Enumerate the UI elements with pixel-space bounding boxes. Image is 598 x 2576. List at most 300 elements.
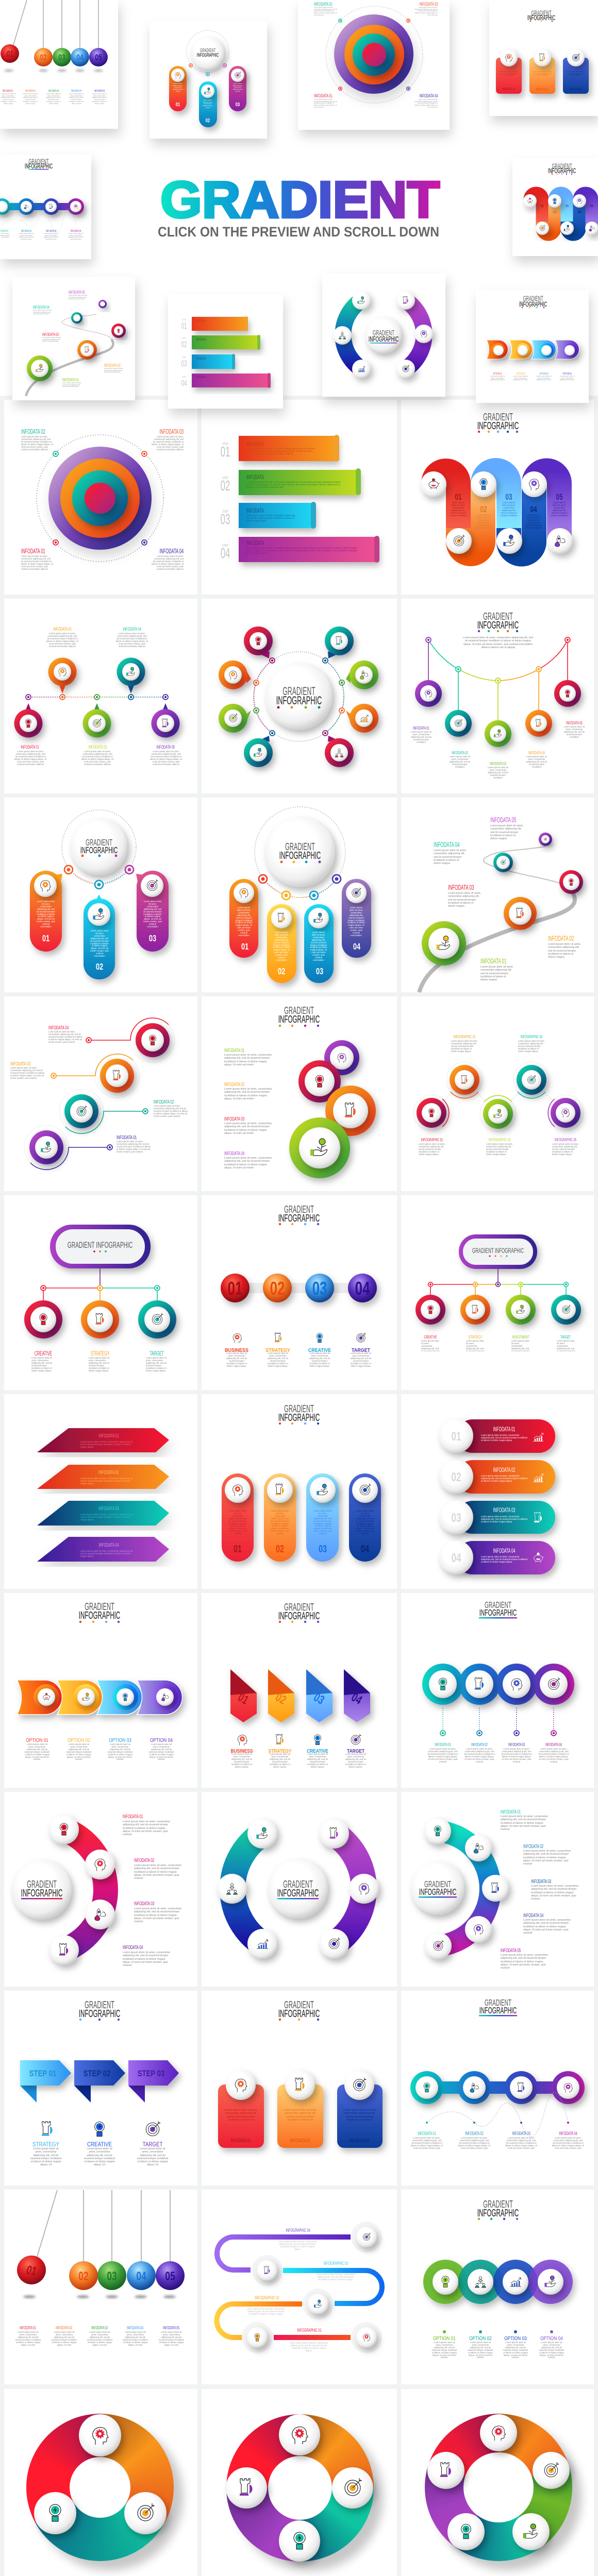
center sphere: [268, 1859, 328, 1919]
text: infodata 01: INFODATA 01: [435, 1743, 451, 1747]
hero card: s-curve right: INFOGRAPHIC: [548, 167, 576, 175]
band labels: 05: [556, 493, 563, 502]
hero card: s-curve right: 02: [553, 210, 556, 214]
column 04: Lorem ipsum dolor sit amet, consectetur adipiscing elit, sed do eiusmod tempor incididunt ut labore et dolore magna aliqua. Ut enim ad minim veniam, quis nostrud: [356, 1510, 374, 1535]
hero card: chain left: [0, 155, 91, 259]
text: infodata 05: INFODATA 05: [501, 1947, 521, 1953]
text: infographic 04: [518, 1035, 545, 1058]
panel: beaded chain: [401, 1991, 594, 2185]
panel: four rounded columns: [202, 1394, 397, 1589]
center sphere title: [265, 817, 335, 887]
nodes: [427, 2414, 570, 2550]
panel: newton cradle: [4, 2190, 197, 2384]
arc: [438, 1831, 490, 1946]
hero card: s-curve right: GRADIENT: [552, 163, 572, 171]
dotted drops: [443, 1708, 554, 1730]
text: infodata 01: [15, 2326, 41, 2351]
text: infodata 04: INFODATA 04: [523, 1912, 543, 1918]
strings: [37, 2190, 170, 2262]
ribbon 04: INFODATA 04: [98, 1541, 119, 1548]
text: infodata 02: INFODATA 02: [465, 2131, 484, 2136]
hero card: ribbons: INFODATA: [196, 357, 206, 361]
hero card: ribbons: 03: [181, 359, 187, 368]
column 02: 02: [276, 1543, 284, 1555]
hero card: chain left: INFOGRAPHIC: [25, 163, 53, 171]
panel: concentric circles infographic: [4, 400, 197, 595]
nodes: [34, 1684, 178, 1710]
text: infodata 01: INFODATA 01: [224, 1047, 244, 1053]
balls: 01: [25, 2263, 37, 2278]
hero card: ribbons: [168, 294, 283, 409]
hero card: road: INFODATA 03: [42, 333, 59, 337]
text: strategy: STRATEGY: [32, 2141, 59, 2148]
center sphere title: GRADIENT: [285, 841, 315, 853]
nodes: [49, 1815, 115, 1965]
ring: [226, 2414, 374, 2562]
icon nodes: [421, 471, 573, 554]
text: option 02: OPTION 02: [469, 2335, 492, 2342]
panel: zigzag five nodes: [401, 996, 594, 1191]
markers: [64, 866, 134, 889]
center sphere title: [265, 663, 333, 730]
text: infodata 02: INFODATA 02: [56, 2326, 72, 2330]
nodes: [217, 1819, 379, 1959]
row 03: INFODATA 03: [493, 1507, 516, 1514]
text: infodata 02: Lorem ipsum dolor sit amet, consectetur adipiscing elit, sed do eiusmod tempor incididunt ut labore et dolore magna aliqua. Ut enim ad minim veniam, quis nostrud: [134, 1864, 181, 1880]
hero card: concentric circles: INFODATA 02: [314, 2, 333, 7]
step 04: 04: [221, 545, 230, 561]
text: infographic 01: INFOGRAPHIC 01: [421, 1138, 443, 1142]
pill 03: [304, 904, 334, 983]
text: infodata 02: [224, 1081, 274, 1104]
ribbon 02: INFODATA 02: [98, 1469, 119, 1475]
text: infodata 05: Lorem ipsum dolor sit amet, consectetur adipiscing elit, sed do eiusmod tempor incididunt ut labore et dolore magna aliqua. Ut enim ad minim veniam, quis nostrud: [501, 1954, 548, 1970]
text: option 03: OPTION 03: [109, 1737, 131, 1743]
text: infodata 02: INFODATA 02: [53, 626, 72, 632]
hero card: three pills: GRADIENT: [200, 47, 215, 53]
hero card: chevrons: OPTION 04: [563, 372, 572, 375]
text: infodata 04: INFODATA 04: [123, 626, 141, 632]
hero card: three boxes: INFODATA 01: [503, 88, 515, 91]
dotted timeline: [28, 697, 165, 698]
overlapping circles: [423, 2260, 573, 2304]
hero card: pendulum: 05: [95, 53, 102, 63]
text: infodata 04: Lorem ipsum dolor sit amet, consectetur adipiscing elit, sed do eiusmod tempor incididunt ut labore et dolore magna aliqua. Ut enim ad minim veniam, quis nostrud: [523, 1919, 571, 1935]
node: target: [138, 1300, 176, 1372]
markers: [259, 875, 341, 900]
column 03: 03: [319, 1543, 327, 1555]
panel: central sphere with eight pins: [202, 599, 397, 793]
text: infodata 03: [87, 2326, 112, 2351]
text: infodata 01: [21, 548, 53, 571]
text: infographic 04: [277, 2228, 318, 2251]
title: GRADIENT: [284, 1999, 314, 2011]
text: infographic 01: INFOGRAPHIC 01: [297, 2328, 322, 2333]
hero card: chain left: INFODATA 03: [46, 229, 57, 232]
hero card: three boxes: [489, 0, 598, 116]
text: option 02: OPTION 02: [68, 1737, 90, 1743]
text: infodata 03: [152, 429, 184, 451]
text: option 01: OPTION 01: [26, 1737, 48, 1743]
hero card: three boxes: GRADIENT: [531, 10, 552, 18]
step 04: [221, 536, 379, 563]
pill 02: 02: [96, 962, 103, 972]
nodes: [226, 2414, 373, 2562]
band labels: 01: [455, 493, 462, 502]
text: infodata 03: INFODATA 03: [512, 2131, 530, 2136]
node 03: [95, 1054, 139, 1098]
text: infodata 04: INFODATA 04: [48, 1024, 69, 1030]
title: INFOGRAPHIC: [79, 2008, 120, 2020]
text: infodata 02: Lorem ipsum dolor sit amet, consectetur adipiscing elit, sed do eiusmod tempor incididunt ut labore et dolore magna aliqua. Ut enim ad minim veniam, quis nostrud: [523, 1850, 571, 1866]
text: infographic 03: INFOGRAPHIC 03: [489, 1138, 510, 1142]
row 02: [439, 1460, 555, 1494]
ribbon 01: INFODATA 01: [98, 1432, 119, 1438]
icons: [429, 1670, 568, 1698]
text: infodata 03: [531, 1878, 579, 1902]
text: infodata 04: INFODATA 04: [224, 1150, 244, 1156]
chart: nested gradient discs: [48, 447, 152, 550]
pill 01: 01: [42, 934, 49, 944]
text: infodata 03: [224, 1115, 274, 1139]
pins: [14, 657, 179, 738]
text: creative: CREATIVE: [87, 2141, 112, 2148]
text: infodata 02: [134, 1857, 182, 1881]
hero card: s-curve right: [512, 158, 598, 256]
center sphere: GRADIENT: [424, 1879, 451, 1890]
ball purple: [324, 1040, 359, 1075]
text: infodata 03: INFODATA 03: [134, 1900, 154, 1906]
text: infodata 04: Lorem ipsum dolor sit amet, consectetur adipiscing elit, sed do eiusmod tempor incididunt ut labore et dolore magna: [434, 849, 467, 865]
hero card: pendulum: 02: [40, 53, 47, 63]
title: INFOGRAPHIC: [479, 1608, 517, 1618]
title: [477, 2199, 519, 2220]
panel: horizontal capsules with spheres: [401, 1394, 594, 1589]
text: infodata 01: INFODATA 01: [117, 1134, 137, 1140]
text: infodata 02: Lorem ipsum dolor sit amet, consectetur adipiscing elit, sed do eiusmod tempor incididunt ut labore et dolore magna aliqua. Ut enim ad minim: [224, 1088, 272, 1100]
text: option 03: Lorem ipsum dolor sit amet, consectetur adipiscing elit, sed do eiusmod tempor incididunt ut labore et dolore magna aliqua. Ut enim ad minim veniam,: [503, 2342, 528, 2359]
tag 03: 03: [311, 1690, 327, 1707]
text: infodata 04: [116, 626, 148, 648]
stops: [422, 833, 583, 965]
title capsule: [50, 1225, 151, 1268]
panel: ring five segments: [401, 2389, 594, 2576]
balls: 02: [270, 1278, 285, 1299]
balls: 03: [107, 2269, 117, 2283]
text: strategy: STRATEGY: [265, 1347, 290, 1353]
node: strategy: STRATEGY: [469, 1335, 483, 1340]
pill 03: Lorem ipsum dolor sit amet, consectetur adipiscing elit, sed do eiusmod tempor incididunt ut labore et dolore magna aliqua. Ut enim ad minim veniam, quis nostrud exercitation: [310, 931, 327, 961]
step 03: 03: [221, 511, 230, 527]
text: infographic 03: INFOGRAPHIC 03: [323, 2261, 348, 2266]
node: strategy: [460, 1295, 490, 1351]
flag 01: STEP 01: [29, 2069, 56, 2078]
tag 01: [230, 1669, 257, 1722]
text: infodata 01: INFODATA 01: [413, 726, 429, 731]
text: infodata 02: INFODATA 02: [21, 429, 45, 436]
text: target: TARGET: [352, 1347, 370, 1353]
text: infodata 02: [52, 2326, 77, 2351]
ring: [26, 2414, 174, 2561]
text: option 02: [66, 1737, 92, 1762]
hero card: chevrons: OPTION 02: [517, 372, 525, 375]
text: infodata 01: [480, 958, 513, 982]
row 04: 04: [451, 1551, 461, 1565]
panel: step flags: [4, 1991, 197, 2185]
hero card: concentric circles: [298, 0, 450, 130]
text: infodata 04: INFODATA 04: [559, 2131, 577, 2136]
text: creative: CREATIVE: [307, 1748, 328, 1754]
text: strategy: [269, 1734, 292, 1768]
text: infodata 02: [458, 2131, 490, 2155]
text: creative: [306, 1735, 329, 1768]
tag 02: 02: [273, 1690, 289, 1707]
tag 03: [306, 1669, 333, 1722]
text: infodata 01: Lorem ipsum dolor sit amet, consectetur adipiscing elit, sed do eiusmod tempor incididunt ut labore et dolore magna aliqua. Ut enim ad minim veniam, quis nostrud: [123, 1820, 170, 1836]
text: infodata 01: [224, 1047, 274, 1070]
step 03: [221, 502, 316, 529]
title: [278, 1204, 320, 1225]
connectors: [41, 1268, 160, 1301]
title: [479, 1998, 517, 2016]
card 03: Lorem ipsum dolor sit amet, consectetur adipiscing elit, sed do eiusmod tempor incididunt ut labore et: [343, 2109, 376, 2122]
column 02: Lorem ipsum dolor sit amet, consectetur adipiscing elit, sed do eiusmod tempor incididunt ut labore et dolore magna aliqua. Ut enim ad minim veniam, quis nostrud: [271, 1510, 289, 1535]
hero card: chain left: INFODATA 02: [21, 229, 32, 232]
node 02: [59, 1089, 104, 1133]
text: infodata 04: [434, 841, 467, 866]
panel: scroll ribbon steps: [202, 400, 397, 595]
text: option 03: [107, 1737, 133, 1762]
column 03: [306, 1473, 339, 1562]
text: strategy: [265, 1333, 290, 1368]
tag 02: [268, 1669, 294, 1722]
text: infographic 02: [451, 1035, 478, 1058]
text: infodata 01: INFODATA 01: [21, 548, 45, 555]
text: infographic 01: [289, 2328, 329, 2352]
text: infographic 05: [552, 1138, 579, 1161]
hero card: pendulum: INFODATA 03: [48, 89, 59, 92]
hero card: ribbons: 04: [181, 378, 187, 388]
column 02: [264, 1473, 296, 1562]
column 04: [349, 1473, 381, 1562]
panel: serpentine path: [202, 2190, 397, 2384]
balls: 05: [165, 2269, 175, 2283]
text: infodata 04: [523, 1912, 572, 1936]
panel: hanging curve infographic: [401, 599, 594, 793]
text: option 01: Lorem ipsum dolor sit amet, consectetur adipiscing elit, sed do eiusmod tempor incididunt ut labore et dolore magna aliqua. Ut enim ad minim veniam,: [25, 1743, 49, 1760]
hero card: three pills: INFOGRAPHIC: [197, 52, 219, 58]
hero card: open ring: GRADIENT: [373, 329, 394, 337]
headline: GRADIENT: [160, 171, 440, 229]
title capsule: [459, 1234, 537, 1269]
text: infodata 03: Lorem ipsum dolor sit amet, consectetur adipiscing elit, sed do eiusmod tempor incididunt ut labore et dolore magna aliqua. Ut enim ad minim veniam, quis nostrud: [134, 1907, 181, 1923]
panel: org tree three branches: [4, 1195, 197, 1390]
text: infodata 04: INFODATA 04: [127, 2326, 143, 2330]
pill 03: 03: [316, 967, 323, 977]
column 01: Lorem ipsum dolor sit amet, consectetur adipiscing elit, sed do eiusmod tempor incididunt ut labore et dolore magna aliqua. Ut enim ad minim veniam, quis nostrud: [228, 1510, 247, 1535]
connectors: [430, 1269, 566, 1296]
ring arcs: [232, 1834, 364, 1944]
pill 03: 03: [149, 934, 156, 944]
dotted connectors: [263, 879, 337, 897]
text: infodata 01: Lorem ipsum dolor sit amet, consectetur adipiscing elit, sed do eiusmod tempor incididunt ut labore et dolore magna: [480, 965, 513, 981]
text: infodata 04: INFODATA 04: [545, 1743, 562, 1747]
pill 04: [342, 879, 371, 958]
text: business: BUSINESS: [231, 1748, 253, 1754]
hero card: road: INFODATA 04: [33, 306, 49, 310]
text: infodata 02: [21, 429, 53, 451]
panel: numbered balls: [202, 1195, 397, 1390]
headline: CLICK ON THE PREVIEW AND SCROLL DOWN: [158, 224, 439, 240]
text: option 02: [468, 2330, 493, 2361]
text: infographic 03: [486, 1138, 513, 1161]
panel: ring three segments: [4, 2389, 197, 2576]
title: INFOGRAPHIC: [278, 1213, 320, 1224]
markers: [53, 451, 147, 545]
text: infodata 01: [123, 1813, 171, 1837]
hero card: chevrons: GRADIENT: [523, 295, 543, 303]
hero card: concentric circles: INFODATA 03: [420, 2, 438, 7]
panel: three pills under sphere: [4, 798, 197, 992]
text: option 02: Lorem ipsum dolor sit amet, consectetur adipiscing elit, sed do eiusmod tempor incididunt ut labore et dolore magna aliqua. Ut enim ad minim veniam,: [67, 1743, 91, 1760]
hero card: concentric circles: INFODATA 04: [420, 93, 438, 98]
text: infodata 04: INFODATA 04: [159, 548, 184, 555]
text: infographic 05: INFOGRAPHIC 05: [555, 1138, 576, 1142]
balls: 02: [78, 2269, 89, 2283]
text: infographic 02: [246, 2295, 286, 2316]
card 02: INFODATA 02: [290, 2137, 310, 2143]
text: infodata 03: INFODATA 03: [448, 884, 474, 892]
text: option 01: OPTION 01: [433, 2335, 456, 2342]
pill 04: 04: [353, 942, 360, 952]
text: option 03: OPTION 03: [504, 2335, 527, 2342]
text: infodata 02: INFODATA 02: [134, 1857, 154, 1863]
card 01: [218, 2070, 264, 2148]
node: creative: CREATIVE: [35, 1350, 52, 1358]
ball red: [298, 1060, 341, 1103]
text: infodata 03: INFODATA 03: [91, 2326, 108, 2330]
text: infodata 02: INFODATA 02: [523, 1843, 543, 1849]
text: infodata 01: INFODATA 01: [501, 1808, 521, 1815]
text: creative: [307, 1333, 332, 1368]
text: creative: [84, 2122, 115, 2168]
row 03: 03: [451, 1511, 461, 1525]
row 02: 02: [451, 1470, 461, 1484]
ribbon 03: INFODATA 03: [98, 1505, 119, 1511]
step 02: 02: [221, 478, 230, 494]
text: infodata 04: [552, 2131, 584, 2155]
panel: stacked growing balls: [202, 996, 397, 1191]
hero card: road: INFODATA 05: [69, 291, 85, 295]
text: infodata 02: Lorem ipsum dolor sit amet, consectetur adipiscing elit, sed do eiusmod tempor incididunt ut labore et dolore magna: [548, 943, 581, 959]
hero card: three boxes: INFODATA 02: [536, 88, 549, 91]
text: infographic 04: INFOGRAPHIC 04: [521, 1035, 542, 1039]
text: option 04: [148, 1737, 174, 1762]
text: infodata 01: INFODATA 01: [123, 1813, 143, 1819]
flag 03: [128, 2060, 179, 2103]
column 03: Lorem ipsum dolor sit amet, consectetur adipiscing elit, sed do eiusmod tempor incididunt ut labore et dolore magna aliqua. Ut enim ad minim veniam, quis nostrud: [313, 1510, 332, 1535]
markers: [426, 637, 570, 683]
text: infodata 05: INFODATA 05: [163, 2326, 179, 2330]
text: infodata 04: [224, 1150, 274, 1173]
panel: dotted timeline with pins: [4, 599, 197, 793]
text: infodata 02: INFODATA 02: [224, 1081, 244, 1087]
text: infodata 03: Lorem ipsum dolor sit amet, consectetur adipiscing elit, sed do eiusmod tempor incididunt ut labore et dolore magna aliqua. Ut enim ad minim veniam, quis nostrud: [531, 1885, 578, 1901]
text: infodata 05: [563, 721, 586, 739]
text: infodata 02: INFODATA 02: [452, 751, 468, 755]
text: infographic 03: [315, 2261, 356, 2282]
hero card: chain left: INFODATA 04: [71, 229, 81, 232]
center sphere title: [71, 819, 127, 875]
node connectors: [30, 1018, 169, 1170]
panel: four pills under sphere: [202, 798, 397, 992]
center sphere title: INFOGRAPHIC: [276, 694, 322, 707]
hero card: pendulum: INFODATA 02: [25, 89, 36, 92]
hero card: ribbons: INFODATA: [196, 338, 206, 342]
text: option 02: Lorem ipsum dolor sit amet, consectetur adipiscing elit, sed do eiusmod tempor incididunt ut labore et dolore magna aliqua. Ut enim ad minim veniam,: [468, 2342, 493, 2359]
step 01: 01: [221, 444, 230, 460]
balls: 03: [312, 1278, 327, 1299]
title: GRADIENT: [485, 1600, 511, 1611]
title: GRADIENT: [284, 1602, 314, 1613]
ring: [425, 2414, 572, 2561]
step 02: [221, 468, 361, 495]
card 02: [277, 2070, 323, 2148]
text: target: TARGET: [347, 1748, 364, 1754]
node arcs: [442, 1092, 555, 1127]
center sphere: [12, 1860, 72, 1920]
title capsule: GRADIENT INFOGRAPHIC: [68, 1241, 132, 1250]
text: creative: CREATIVE: [308, 1347, 331, 1353]
text: infodata 03: Lorem ipsum dolor sit amet, consectetur adipiscing elit, sed do eiusmod tempor incididunt ut labore et dolore magna: [448, 892, 481, 908]
band labels: 02: [480, 505, 487, 515]
road: [419, 846, 575, 992]
markers: [254, 658, 344, 736]
text: infodata 04: Lorem ipsum dolor sit amet, consectetur adipiscing elit, sed do eiusmod tempor incididunt ut labore et dolore magna aliqua. Ut enim ad minim: [224, 1157, 272, 1170]
text: strategy: STRATEGY: [269, 1748, 292, 1754]
hero card: s-curve right: 01: [541, 204, 544, 208]
hero card: pendulum: 01: [6, 49, 13, 59]
text: infodata 03: [448, 884, 481, 908]
ribbon 02: [37, 1465, 169, 1489]
text: infodata 03: INFODATA 03: [531, 1878, 551, 1884]
title capsule: GRADIENT INFOGRAPHIC: [472, 1247, 524, 1255]
panel: slanted arrow ribbons: [4, 1394, 197, 1589]
text: infodata 03: [81, 744, 113, 766]
title: [479, 1600, 517, 1619]
pill 01: [229, 879, 258, 958]
title: [278, 1999, 320, 2021]
hero card: chevrons: [476, 290, 589, 403]
center sphere: INFOGRAPHIC: [419, 1887, 457, 1897]
text: strategy: [30, 2122, 62, 2168]
panel: diagonal stepped nodes: [4, 996, 197, 1191]
title: [278, 1403, 320, 1425]
text: infodata 05: [150, 744, 182, 766]
card 02: Lorem ipsum dolor sit amet, consectetur adipiscing elit, sed do eiusmod tempor incididunt ut labore et: [284, 2109, 317, 2122]
text: infodata 02: [448, 751, 471, 769]
text: infodata 01: [14, 744, 46, 766]
text: infodata 04: [152, 548, 184, 571]
text: option 04: OPTION 04: [150, 1737, 173, 1743]
hero card: concentric circles: INFODATA 01: [314, 93, 333, 98]
title: INFOGRAPHIC: [479, 2006, 517, 2016]
hero card: chevrons: OPTION 01: [493, 372, 502, 375]
hero card: chevrons: INFOGRAPHIC: [519, 301, 547, 309]
text: infodata 04: [123, 1944, 171, 1968]
step 01: [221, 435, 339, 462]
panel: folded tags: [202, 1593, 397, 1788]
